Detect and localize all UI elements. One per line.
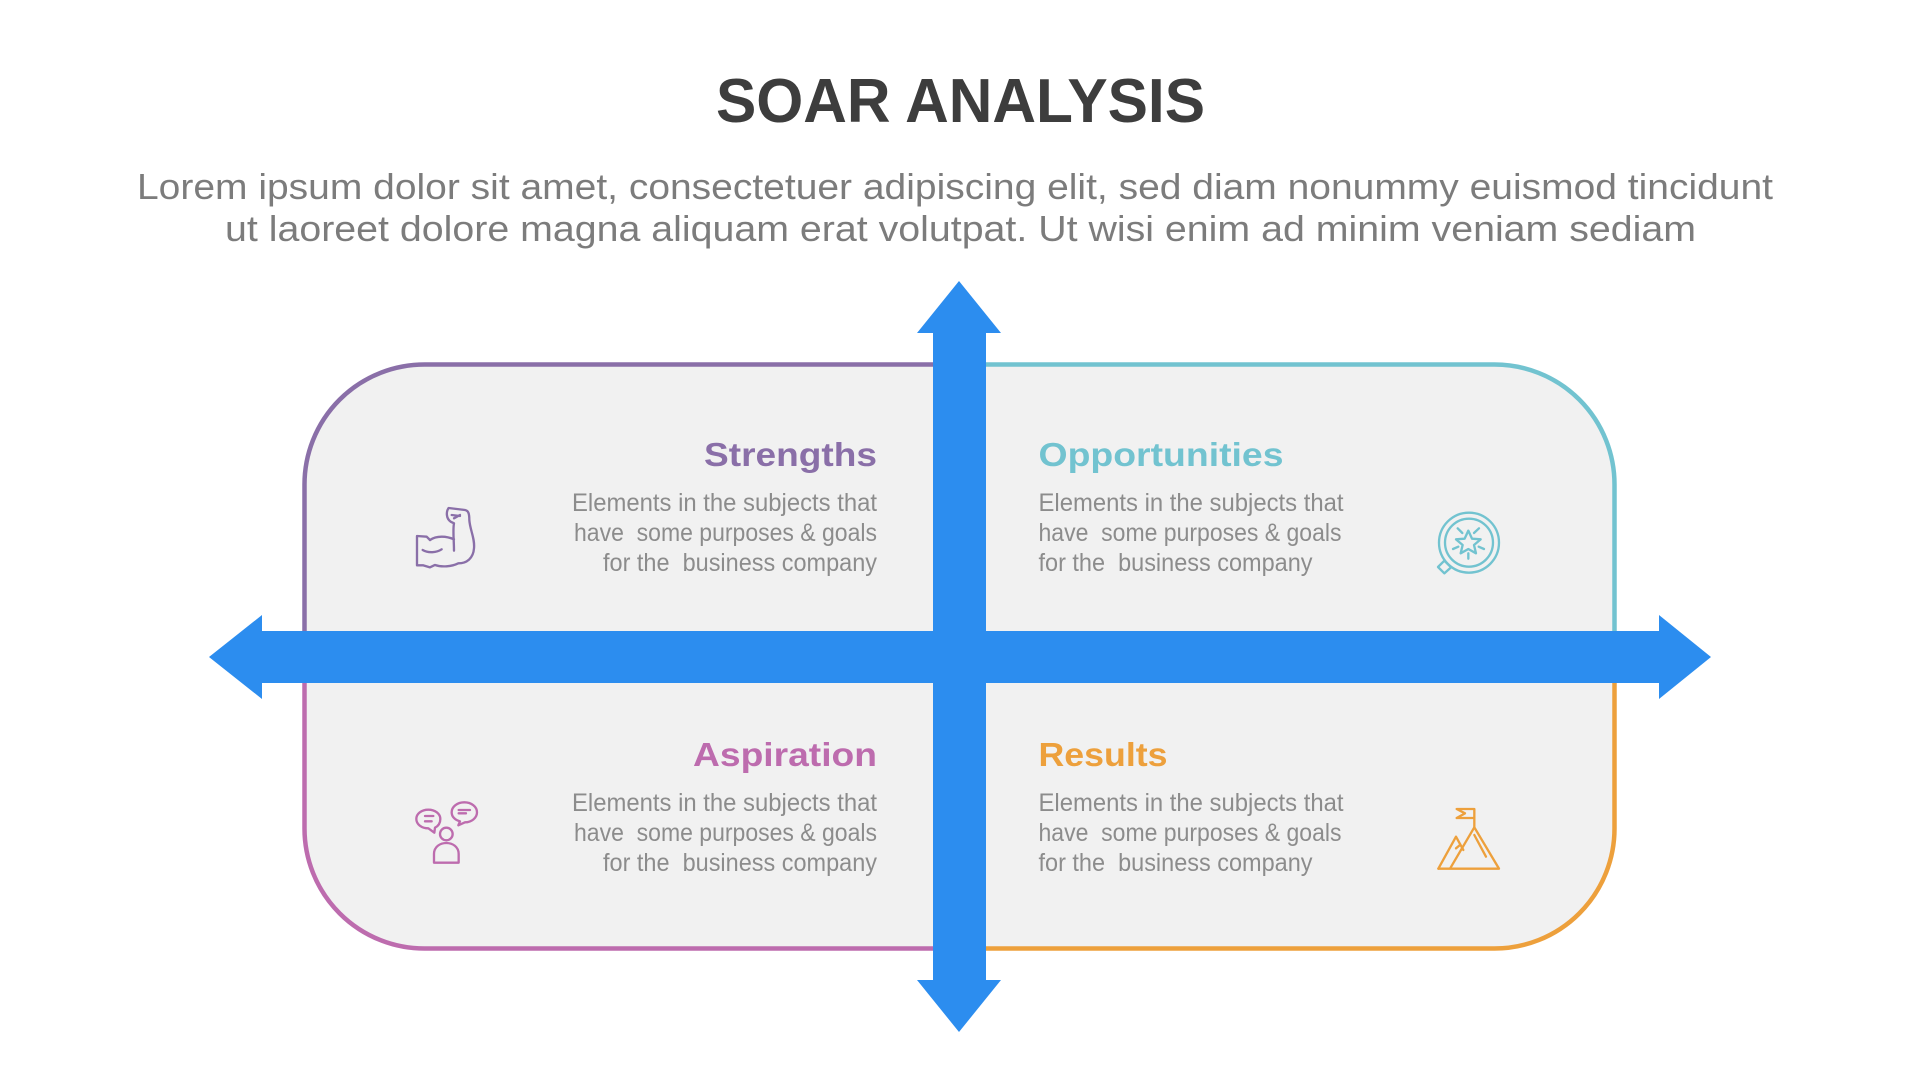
text block: opportunities	[1038, 489, 1344, 577]
title: SOAR ANALYSIS	[716, 67, 1205, 136]
text block: aspiration: Elements in the subjects that	[572, 789, 877, 817]
quadrant border: aspiration	[304, 657, 959, 948]
icon: mountain with flag	[1438, 809, 1499, 869]
icon: person with speech bubbles	[416, 802, 477, 863]
text block: results: Elements in the subjects that	[1038, 789, 1344, 817]
subtitle text	[137, 166, 1773, 249]
text block: opportunities: have some purposes & goals	[1038, 519, 1342, 547]
quadrant border: results	[959, 657, 1614, 949]
text block: strengths	[572, 489, 877, 577]
heading: aspiration: Aspiration	[693, 736, 877, 773]
text block: results: have some purposes & goals	[1038, 819, 1342, 847]
text block: aspiration: for the business company	[603, 849, 877, 877]
text block: opportunities: for the business company	[1038, 549, 1313, 577]
panel: results	[1038, 736, 1499, 877]
heading: opportunities: Opportunities	[1038, 436, 1284, 473]
heading: results: Results	[1038, 736, 1168, 773]
quadrant border: opportunities	[959, 364, 1614, 657]
heading: strengths: Strengths	[704, 436, 877, 473]
panel: strengths	[417, 436, 877, 577]
text block: results: for the business company	[1038, 849, 1313, 877]
quadrant border: strengths	[304, 364, 959, 657]
subtitle text: Lorem ipsum dolor sit amet, consectetuer adipiscing elit, sed diam nonummy euismod tincidunt	[137, 166, 1773, 207]
text block: strengths: Elements in the subjects that	[572, 489, 877, 517]
text block: aspiration	[572, 789, 877, 877]
text block: strengths: have some purposes & goals	[574, 519, 877, 547]
text block: aspiration: have some purposes & goals	[574, 819, 877, 847]
panel: opportunities	[1038, 436, 1499, 577]
arrow: horizontal double-headed	[209, 615, 1711, 699]
text block: results	[1038, 789, 1344, 877]
subtitle text: ut laoreet dolore magna aliquam erat volutpat. Ut wisi enim ad minim veniam sediam	[225, 208, 1696, 249]
text block: opportunities: Elements in the subjects that	[1038, 489, 1344, 517]
arrow: vertical double-headed	[917, 281, 1001, 1032]
text block: strengths: for the business company	[603, 549, 877, 577]
icon: star badge	[1438, 513, 1499, 573]
icon: flexed arm	[417, 508, 474, 567]
panel: aspiration	[416, 736, 877, 877]
panel: quadrant background	[304, 364, 1614, 948]
